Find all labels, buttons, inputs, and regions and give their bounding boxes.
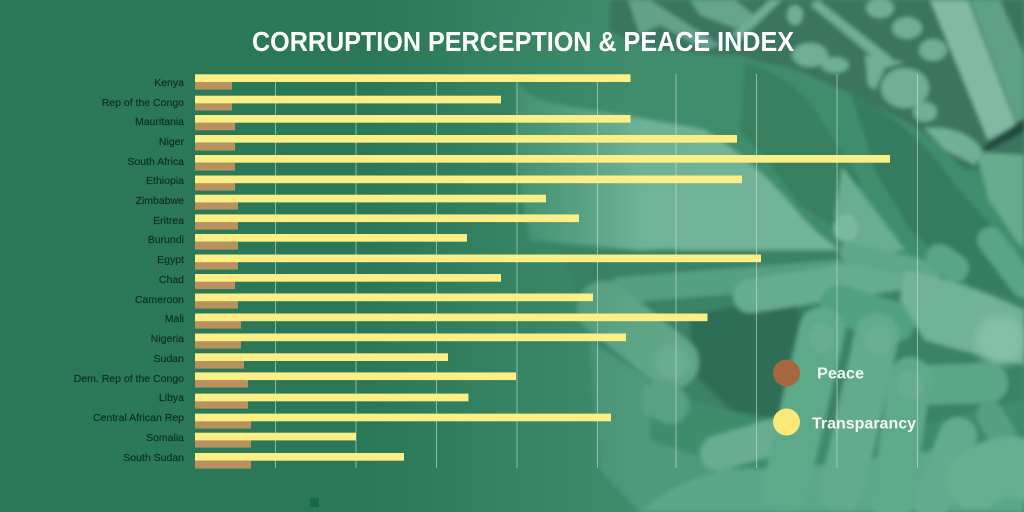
country labels: South Sudan: [123, 452, 184, 464]
transparency bars: [195, 74, 890, 461]
country labels: Sudan: [154, 353, 184, 365]
title: CORRUPTION PERCEPTION & PEACE INDEX: [252, 26, 795, 57]
legend item: peace: [773, 360, 864, 386]
country labels: Cameroon: [135, 294, 184, 306]
bottom fingers: [640, 440, 1024, 512]
country labels: Nigeria: [151, 333, 184, 345]
legend item: transparency: [773, 408, 916, 436]
thumb at right: [930, 383, 988, 385]
country labels: Somalia: [146, 432, 184, 444]
country labels: Dem. Rep of the Congo: [74, 373, 184, 385]
dark hand: [440, 12, 1024, 320]
country labels: Zimbabwe: [136, 195, 184, 207]
country labels: Chad: [159, 274, 184, 286]
light hand: [515, 84, 845, 266]
legend item: peace: Peace: [817, 366, 864, 382]
country labels: South Africa: [127, 156, 184, 168]
dark backdrop and fabric: [610, 0, 1024, 170]
chart gridlines: [276, 74, 918, 468]
country labels: Burundi: [148, 234, 184, 246]
country labels: Libya: [159, 392, 184, 404]
nail highlights: [655, 323, 923, 399]
country labels: Mauritania: [135, 116, 184, 128]
country labels: Egypt: [157, 254, 184, 266]
country labels: Kenya: [154, 77, 184, 89]
horizontal fingers: [620, 272, 850, 290]
country labels: Mali: [165, 313, 184, 325]
left thumb and fingers: [590, 340, 1024, 512]
legend: [773, 360, 916, 436]
country labels: Rep of the Congo: [102, 97, 184, 109]
country labels: Ethiopia: [146, 175, 184, 187]
right palm: [900, 270, 1024, 365]
country labels: Eritrea: [153, 215, 184, 227]
legend item: transparency: Transparancy: [812, 416, 916, 432]
small square marker: [310, 498, 319, 507]
country labels: Niger: [159, 136, 185, 148]
dark lower backdrop: [560, 250, 1024, 430]
country labels: Central African Rep: [93, 412, 184, 424]
peace bars: [195, 82, 251, 469]
country labels: [74, 77, 185, 464]
